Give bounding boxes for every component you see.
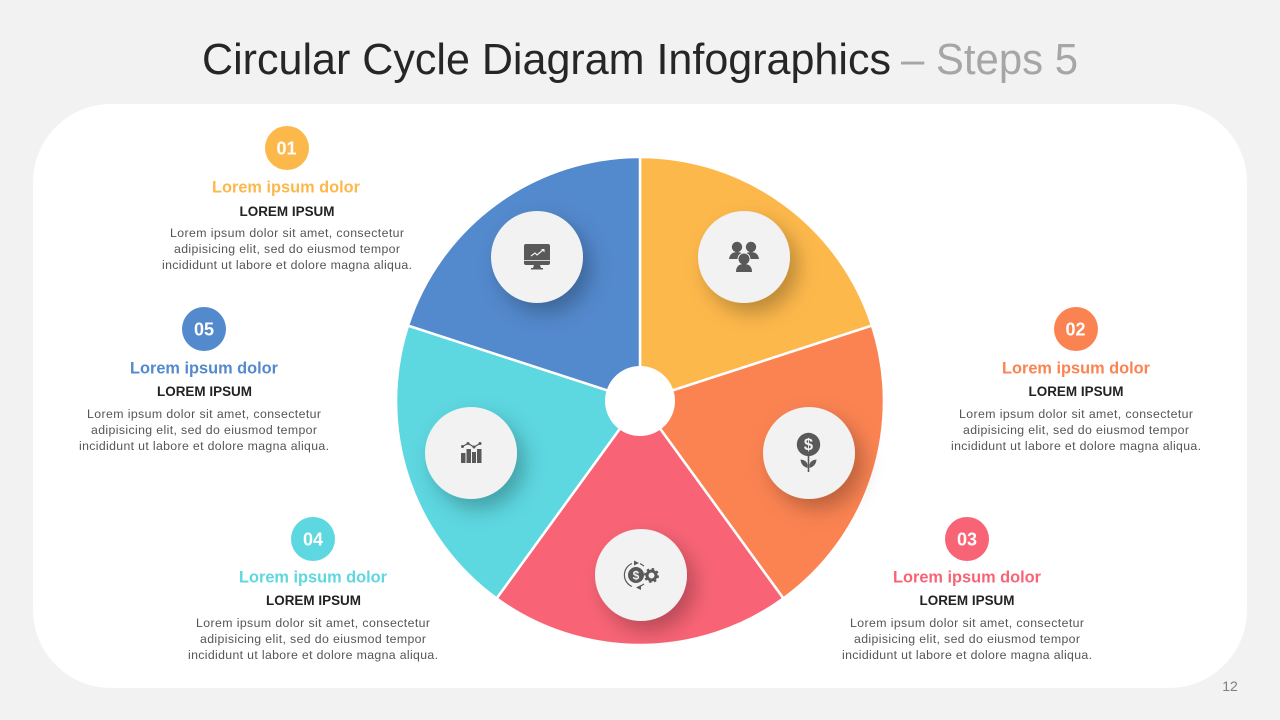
step 03 block: adipisicing elit, sed do eiusmod tempor: [854, 632, 1080, 646]
step 03 block: [842, 517, 1092, 662]
step 02 block: adipisicing elit, sed do eiusmod tempor: [963, 423, 1189, 437]
step 05 block: 05: [194, 320, 214, 340]
step 03 block: 03: [957, 530, 977, 550]
step 05 block: [79, 307, 329, 453]
title: Circular Cycle Diagram Infographics: [202, 35, 891, 84]
step 04 block: [188, 517, 438, 662]
icon: people group: [698, 211, 790, 303]
step 04 block: incididunt ut labore et dolore magna aliqua.: [188, 648, 438, 662]
step 02 block: [951, 307, 1201, 453]
step 04 block: 04: [303, 530, 323, 550]
icon: dollar flower: $: [804, 436, 813, 454]
step 01 block: [162, 126, 412, 272]
step 03 block: incididunt ut labore et dolore magna aliqua.: [842, 648, 1092, 662]
step 03 block: Lorem ipsum dolor: [893, 568, 1042, 586]
step 01 block: incididunt ut labore et dolore magna aliqua.: [162, 258, 412, 272]
step 01 block: LOREM IPSUM: [240, 204, 334, 219]
step 02 block: incididunt ut labore et dolore magna aliqua.: [951, 439, 1201, 453]
step 04 block: Lorem ipsum dolor: [239, 568, 388, 586]
icon: bar and line chart: [425, 407, 517, 499]
step 03 block: Lorem ipsum dolor sit amet, consectetur: [850, 616, 1084, 630]
step 05 block: incididunt ut labore et dolore magna aliqua.: [79, 439, 329, 453]
step 01 block: Lorem ipsum dolor: [212, 178, 361, 196]
step 05 block: adipisicing elit, sed do eiusmod tempor: [91, 423, 317, 437]
step 05 block: Lorem ipsum dolor: [130, 360, 279, 378]
step 02 block: Lorem ipsum dolor: [1002, 360, 1151, 378]
segment 04 cyan: [396, 326, 640, 598]
title: – Steps 5: [901, 35, 1078, 84]
step 02 block: Lorem ipsum dolor sit amet, consectetur: [959, 407, 1193, 421]
pie chart: five segments: [396, 157, 884, 645]
step 05 block: LOREM IPSUM: [157, 384, 252, 399]
step 02 block: LOREM IPSUM: [1028, 384, 1124, 399]
step 05 block: Lorem ipsum dolor sit amet, consectetur: [87, 407, 321, 421]
step 04 block: adipisicing elit, sed do eiusmod tempor: [200, 632, 426, 646]
segment 01 yellow: [640, 157, 872, 401]
step 01 block: adipisicing elit, sed do eiusmod tempor: [174, 242, 400, 256]
segment 02 orange: [640, 326, 884, 598]
segment 03 red: [497, 401, 783, 645]
step 01 block: 01: [276, 138, 297, 158]
segment 05 blue: [408, 157, 640, 401]
icon: dollar flower: [763, 407, 855, 499]
step 04 block: Lorem ipsum dolor sit amet, consectetur: [196, 616, 430, 630]
step 04 block: LOREM IPSUM: [266, 593, 361, 608]
center hub: [605, 366, 675, 436]
step 03 block: LOREM IPSUM: [920, 593, 1014, 608]
icon: money cycle and gear: [595, 529, 687, 621]
icon: money cycle and gear: $: [633, 568, 640, 582]
icon: monitor with chart: [491, 211, 583, 303]
step 02 block: 02: [1065, 320, 1086, 340]
panel: white rounded background: [33, 104, 1247, 688]
page number: 12: [1222, 678, 1238, 694]
step 01 block: Lorem ipsum dolor sit amet, consectetur: [170, 226, 404, 240]
